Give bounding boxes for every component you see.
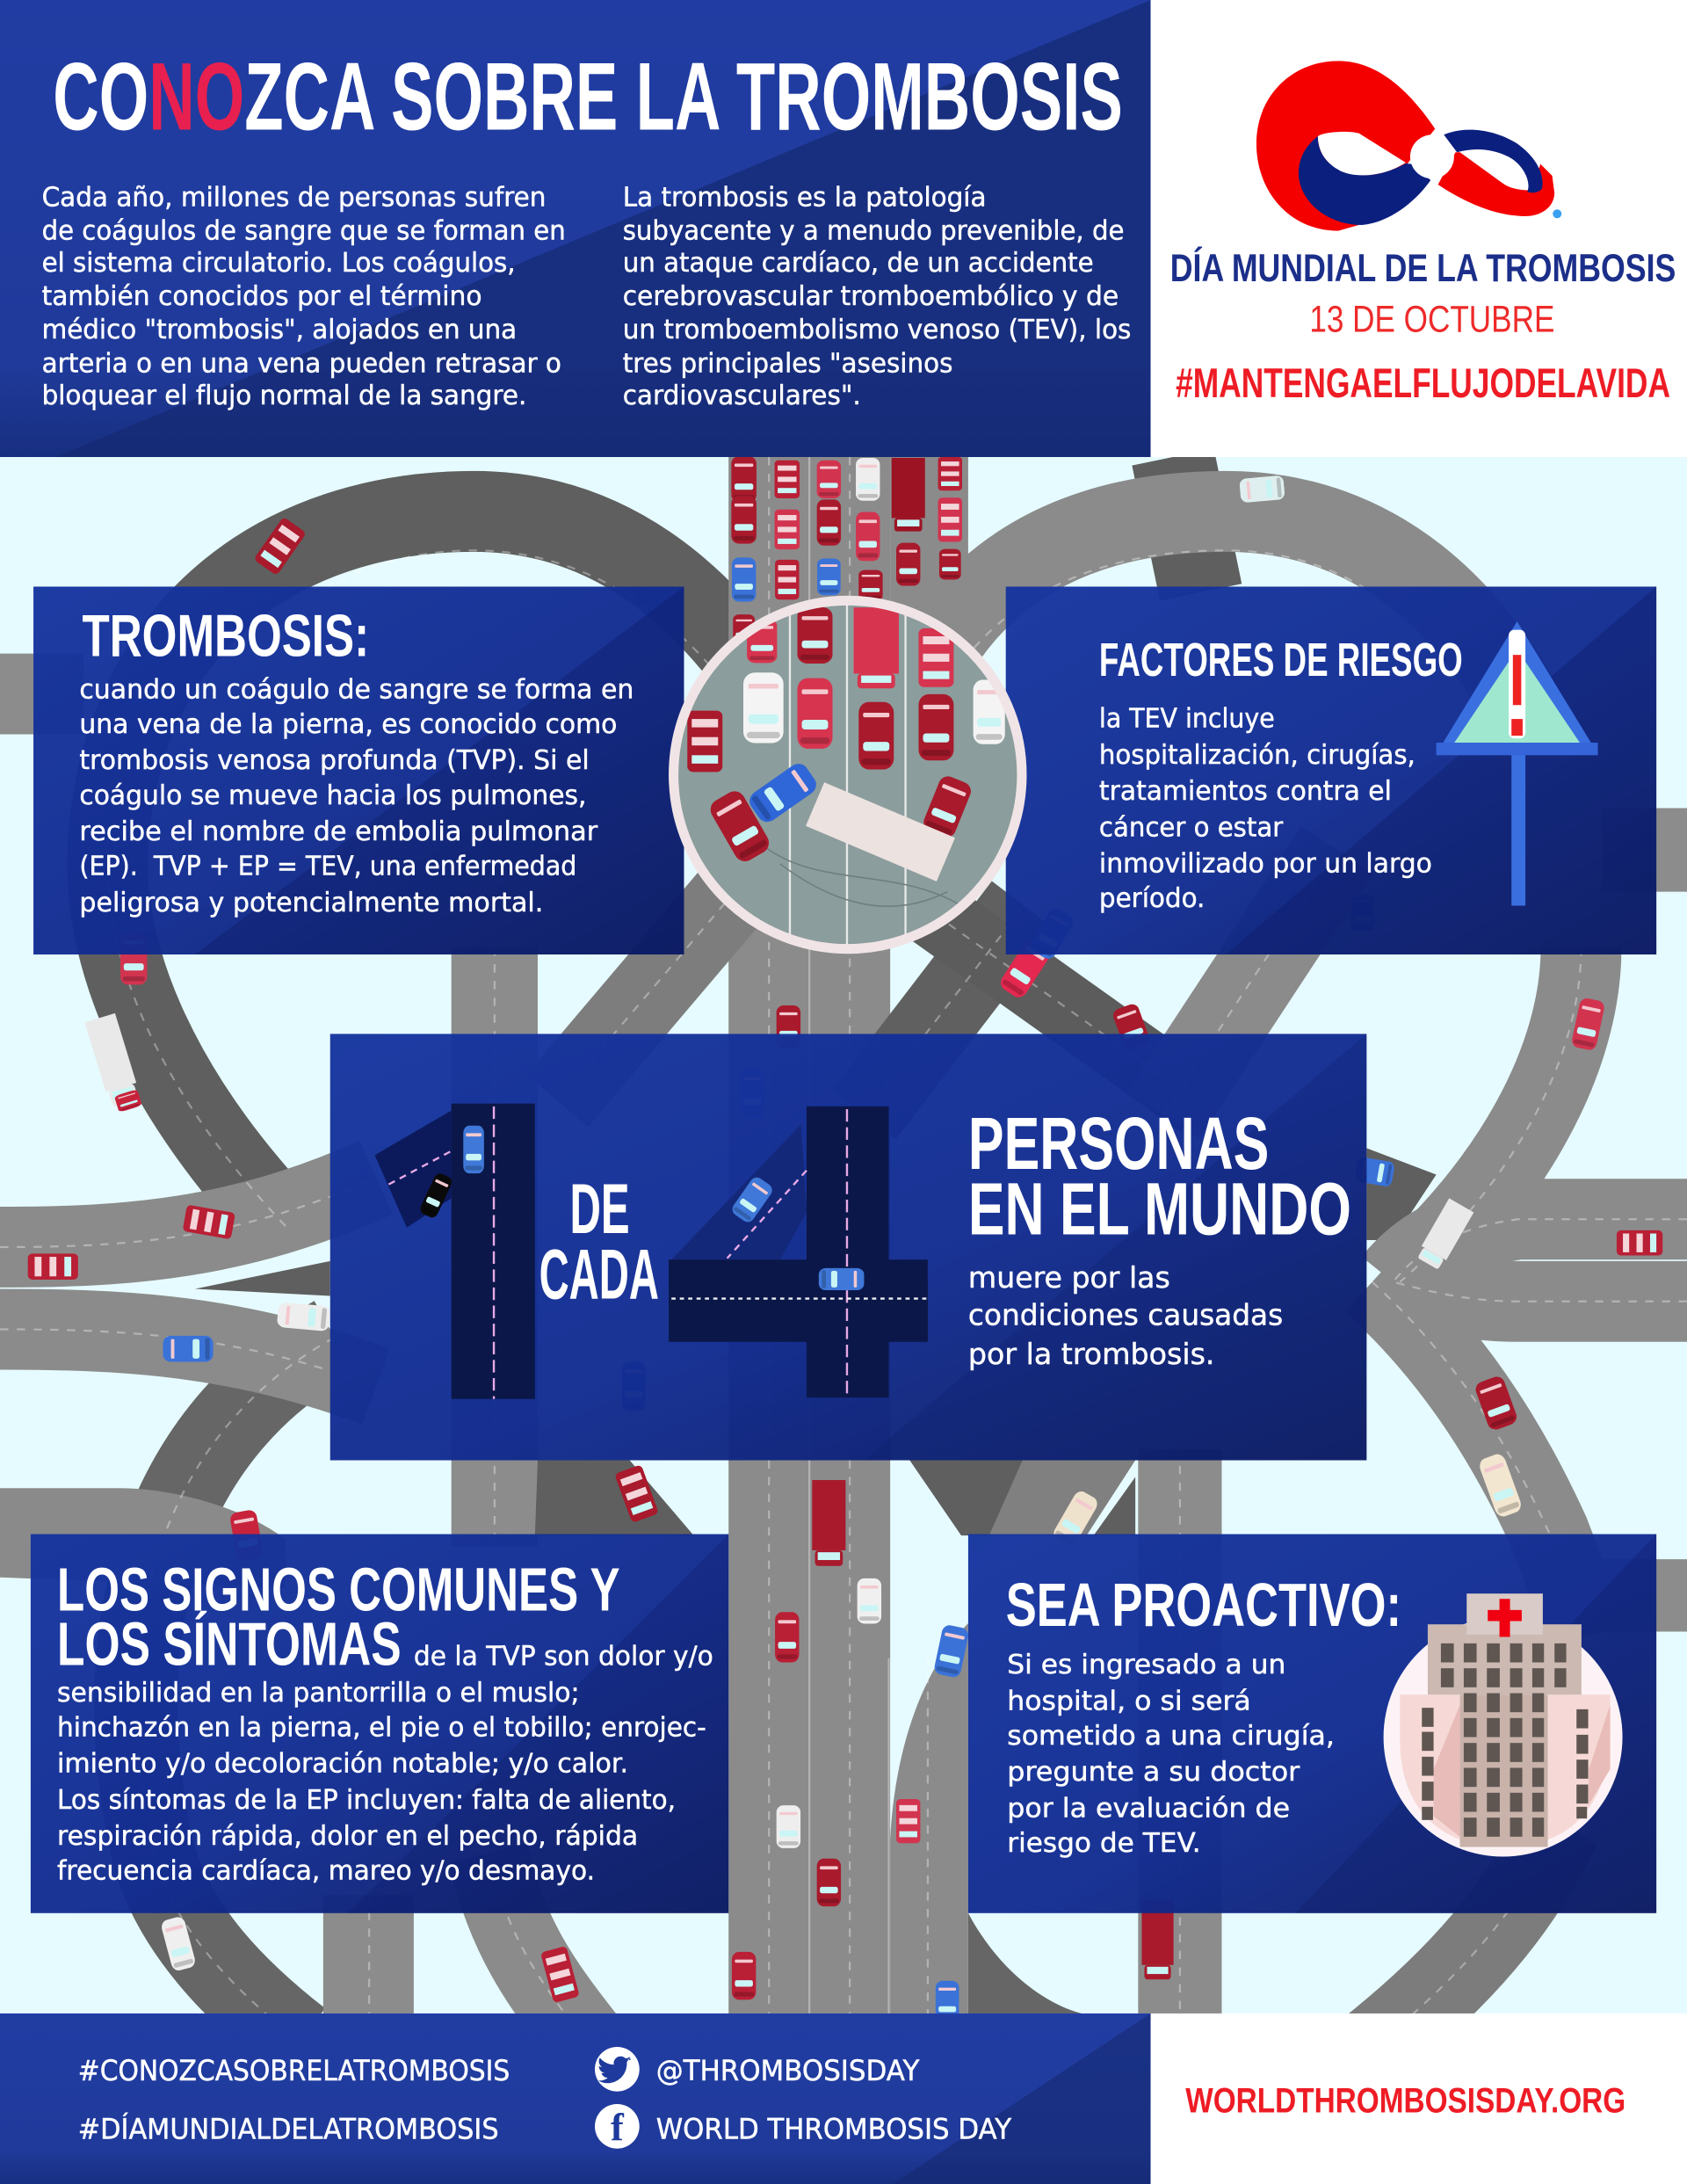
intro column right: cardiovasculares". [623, 381, 861, 411]
icon: facebook: f [611, 2105, 625, 2149]
panel: sea proactivo [968, 1535, 1656, 1913]
cars on the road network [28, 456, 1662, 2024]
title: CONOZCA SOBRE LA TROMBOSIS [53, 43, 1123, 150]
icon: warning sign [1437, 621, 1598, 906]
icon: twitter [595, 2047, 640, 2092]
intro column right [623, 183, 1131, 411]
intro column left: el sistema circulatorio. Los coágulos, [42, 248, 516, 279]
panel: trombosis [33, 586, 684, 954]
panel: factores de riesgo [1006, 586, 1656, 954]
intro column left: arteria o en una vena pueden retrasar o [42, 348, 561, 379]
numeral 1 as a road [374, 1104, 535, 1399]
body text: período. [1099, 883, 1205, 914]
body text: hinchazón en la pierna, el pie o el tobillo; enrojec- [57, 1712, 706, 1743]
heading: TROMBOSIS: [83, 603, 369, 670]
heading: personas en el mundo [968, 1102, 1351, 1251]
heading: LOS SÍNTOMAS [57, 1610, 402, 1679]
jammed cars [687, 607, 1005, 772]
heading: personas en el mundo: EN EL MUNDO [968, 1168, 1351, 1251]
intro column right: tres principales "asesinos [623, 348, 952, 379]
road: lower left junction [0, 1488, 286, 1588]
body text: frecuencia cardíaca, mareo y/o desmayo. [57, 1856, 595, 1887]
intro column right: un ataque cardíaco, de un accidente [623, 248, 1094, 279]
intro column left: médico "trombosis", alojados en una [42, 315, 517, 345]
body text: respiración rápida, dolor en el pecho, rápida [57, 1821, 638, 1852]
facebook name: WORLD THROMBOSIS DAY [656, 2115, 1012, 2146]
logo panel [1151, 0, 1687, 457]
road: light arcs [0, 512, 1687, 2049]
body text: recibe el nombre de embolia pulmonar [79, 816, 598, 847]
body text: por la trombosis. [968, 1337, 1215, 1371]
intro column right: un tromboembolismo venoso (TEV), los [623, 315, 1131, 345]
body text [1099, 704, 1432, 914]
body text: una vena de la pierna, es conocido como [79, 709, 617, 740]
scattered cars [28, 475, 1662, 2024]
body text: hospitalización, cirugías, [1099, 740, 1415, 771]
road: dark wedges [195, 1148, 1437, 1535]
road network background [0, 457, 1687, 2049]
body text: cáncer o estar [1099, 812, 1284, 843]
road: light stubs and verticals [0, 694, 1687, 2021]
crashed cars and truck [706, 760, 974, 882]
body text: trombosis venosa profunda (TVP). Si el [79, 745, 590, 776]
lane markings [0, 457, 1687, 2049]
body text [1007, 1650, 1335, 1859]
central illustration: traffic accident circle [672, 597, 1024, 953]
icon: world thrombosis day logo [1256, 61, 1561, 231]
body text: inmovilizado por un largo [1099, 848, 1432, 879]
icon: facebook [595, 2104, 640, 2149]
body text: condiciones causadas [968, 1298, 1283, 1332]
body text: hospital, o si será [1007, 1686, 1251, 1716]
label: de cada: CADA [539, 1236, 659, 1315]
icon: hospital [1384, 1593, 1623, 1856]
road: light segment lower middle [989, 1461, 1135, 1535]
label: de cada [539, 1170, 659, 1315]
panel: 1 de cada 4 [330, 1034, 1366, 1461]
handle: @THROMBOSISDAY [656, 2056, 920, 2087]
panel: signos y síntomas [31, 1535, 728, 1913]
body text: (EP). TVP + EP = TEV, una enfermedad [79, 852, 576, 882]
body text: Si es ingresado a un [1007, 1650, 1285, 1680]
traffic jam at the top of the highway [731, 456, 962, 645]
intro column left: de coágulos de sangre que se forman en [42, 216, 566, 247]
heading: personas en el mundo: PERSONAS [968, 1102, 1269, 1185]
body text: sensibilidad en la pantorrilla o el muslo; [57, 1678, 580, 1709]
body text: Los síntomas de la EP incluyen: falta de aliento, [57, 1785, 676, 1816]
body text: sometido a una cirugía, [1007, 1721, 1335, 1752]
body text: la TEV incluye [1099, 704, 1275, 735]
body text: peligrosa y potencialmente mortal. [79, 888, 543, 918]
hashtags: #CONOZCASOBRELATROMBOSIS [78, 2056, 510, 2087]
body text: imiento y/o decoloración notable; y/o calor. [57, 1749, 628, 1780]
intro column left: también conocidos por el término [42, 281, 482, 312]
header panel [0, 0, 1151, 457]
date: 13 DE OCTUBRE [1309, 298, 1554, 340]
heading: LOS SIGNOS COMUNES Y [57, 1556, 620, 1624]
road: dark arcs [107, 457, 1201, 2042]
website panel [1151, 2013, 1687, 2184]
footer panel [0, 2013, 1151, 2184]
body text: coágulo se mueve hacia los pulmones, [79, 780, 586, 811]
road: central highway [728, 457, 968, 2021]
label: de cada: DE [569, 1170, 630, 1249]
numeral 4 as a road [669, 1107, 928, 1397]
intro column left [42, 183, 566, 411]
hashtags: #DÍAMUNDIALDELATROMBOSIS [78, 2113, 499, 2146]
road: band diagonals [557, 871, 752, 1100]
intro column left: bloquear el flujo normal de la sangre. [42, 381, 526, 411]
body text: riesgo de TEV. [1007, 1828, 1201, 1859]
road: dark curve beside highway [968, 1913, 1097, 2016]
body text [968, 1260, 1283, 1371]
intro column right: subyacente y a menudo prevenible, de [623, 216, 1124, 247]
intro column right: La trombosis es la patología [623, 183, 987, 214]
body text: por la evaluación de [1007, 1793, 1290, 1824]
intro column right: cerebrovascular tromboembólico y de [623, 281, 1119, 312]
heading [57, 1556, 620, 1679]
body text [79, 674, 634, 918]
road: vertical at lower left [323, 1895, 414, 2021]
body text [57, 1642, 713, 1887]
heading: FACTORES DE RIESGO [1099, 634, 1463, 686]
intro column left: Cada año, millones de personas sufren [42, 183, 547, 214]
body text: cuando un coágulo de sangre se forma en [79, 674, 634, 705]
heading: SEA PROACTIVO: [1006, 1571, 1401, 1639]
body text: tratamientos contra el [1099, 776, 1392, 807]
hashtags [78, 2056, 510, 2146]
body text: muere por las [968, 1260, 1170, 1295]
body text: pregunte a su doctor [1007, 1757, 1300, 1788]
body text: de la TVP son dolor y/o [414, 1642, 713, 1672]
